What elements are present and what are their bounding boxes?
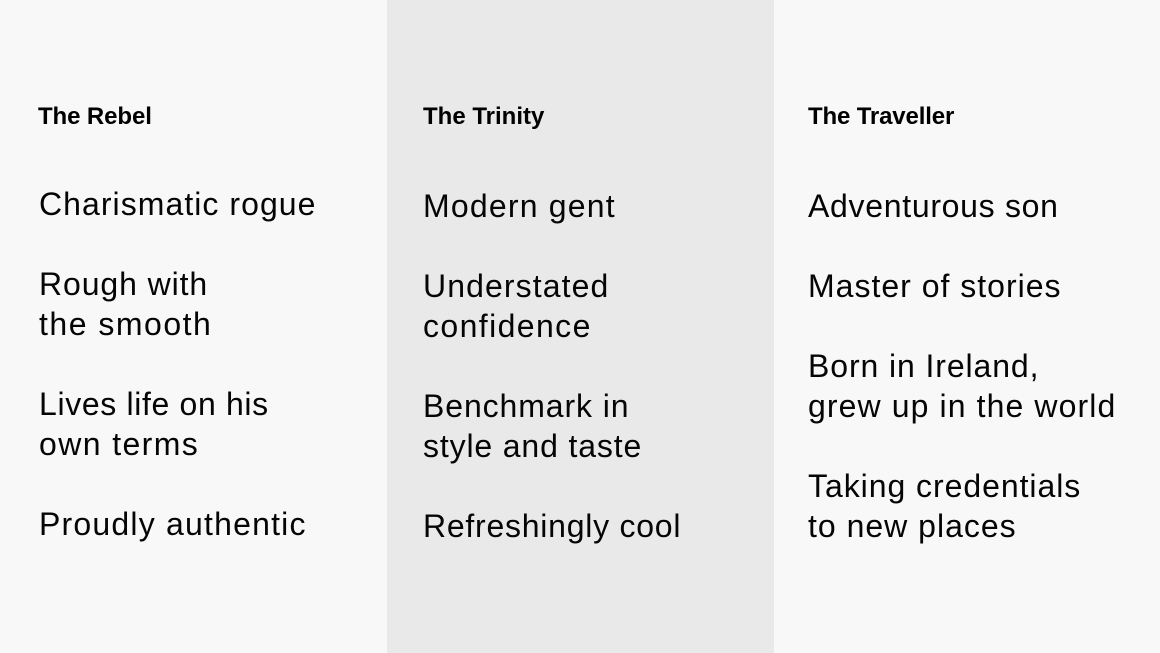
text: Benchmark in style and taste: [423, 388, 642, 464]
text: Proudly authentic: Proudly authentic: [39, 506, 307, 542]
text: Rough with the smooth: Rough with: [39, 266, 208, 302]
text: Taking credentials to new places: to new places: [808, 508, 1017, 544]
text: Rough with the smooth: the smooth: [39, 306, 212, 342]
text: Adventurous son: Adventurous son: [808, 188, 1059, 224]
text: Born in Ireland, grew up in the world: grew up in the world: [808, 388, 1116, 424]
heading: The Trinity: The Trinity: [423, 103, 544, 130]
text: Born in Ireland, grew up in the world: [808, 348, 1116, 424]
text: Lives life on his own terms: own terms: [39, 426, 199, 462]
text: Understated confidence: [423, 268, 609, 344]
text: Lives life on his own terms: Lives life on his: [39, 386, 269, 422]
text: Lives life on his own terms: [39, 386, 269, 462]
text: Taking credentials to new places: Taking credentials: [808, 468, 1081, 504]
text: Benchmark in style and taste: Benchmark in: [423, 388, 629, 424]
text: Refreshingly cool: Refreshingly cool: [423, 508, 681, 544]
text: Modern gent: Modern gent: [423, 188, 616, 224]
text: Master of stories: Master of stories: [808, 268, 1062, 304]
text: Taking credentials to new places: [808, 468, 1081, 544]
panel: The Rebel: [0, 0, 387, 653]
text: Benchmark in style and taste: style and taste: [423, 428, 642, 464]
panel: The Traveller: [774, 0, 1160, 653]
text: Born in Ireland, grew up in the world: Born in Ireland,: [808, 348, 1039, 384]
text: Rough with the smooth: [39, 266, 212, 342]
text: Charismatic rogue: Charismatic rogue: [39, 186, 317, 222]
heading: The Traveller: The Traveller: [808, 103, 954, 130]
text: Understated confidence: confidence: [423, 308, 592, 344]
text: Understated confidence: Understated: [423, 268, 609, 304]
panel: The Trinity: [387, 0, 774, 653]
heading: The Rebel: The Rebel: [38, 103, 152, 130]
